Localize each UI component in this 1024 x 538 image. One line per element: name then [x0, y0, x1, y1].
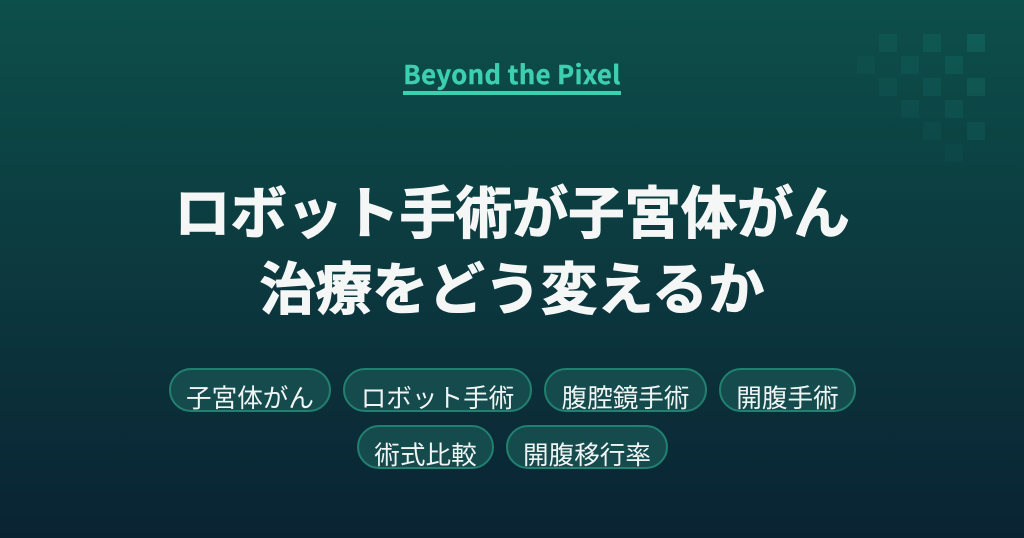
- tag: 術式比較: [357, 425, 494, 469]
- tag: 開腹移行率: [506, 425, 668, 469]
- title: 治療をどう変えるか: [260, 244, 764, 326]
- tag: 腹腔鏡手術: 腹腔鏡手術: [562, 378, 689, 414]
- tag: 術式比較: 術式比較: [374, 434, 477, 472]
- tag: 開腹手術: [719, 368, 856, 412]
- tag: 子宮体がん: [169, 368, 331, 412]
- tag: 腹腔鏡手術: [544, 368, 707, 412]
- tag: ロボット手術: [343, 368, 532, 412]
- tag: ロボット手術: ロボット手術: [361, 378, 514, 414]
- tag: 開腹移行率: 開腹移行率: [523, 434, 651, 472]
- tag: 開腹手術: 開腹手術: [736, 378, 839, 414]
- title: ロボット手術が子宮体がん: [174, 169, 850, 250]
- decorative pixel grid: [879, 34, 985, 140]
- brand label with underline: Beyond the Pixel: [403, 54, 621, 92]
- tag: 子宮体がん: 子宮体がん: [186, 378, 314, 414]
- title: [174, 169, 850, 326]
